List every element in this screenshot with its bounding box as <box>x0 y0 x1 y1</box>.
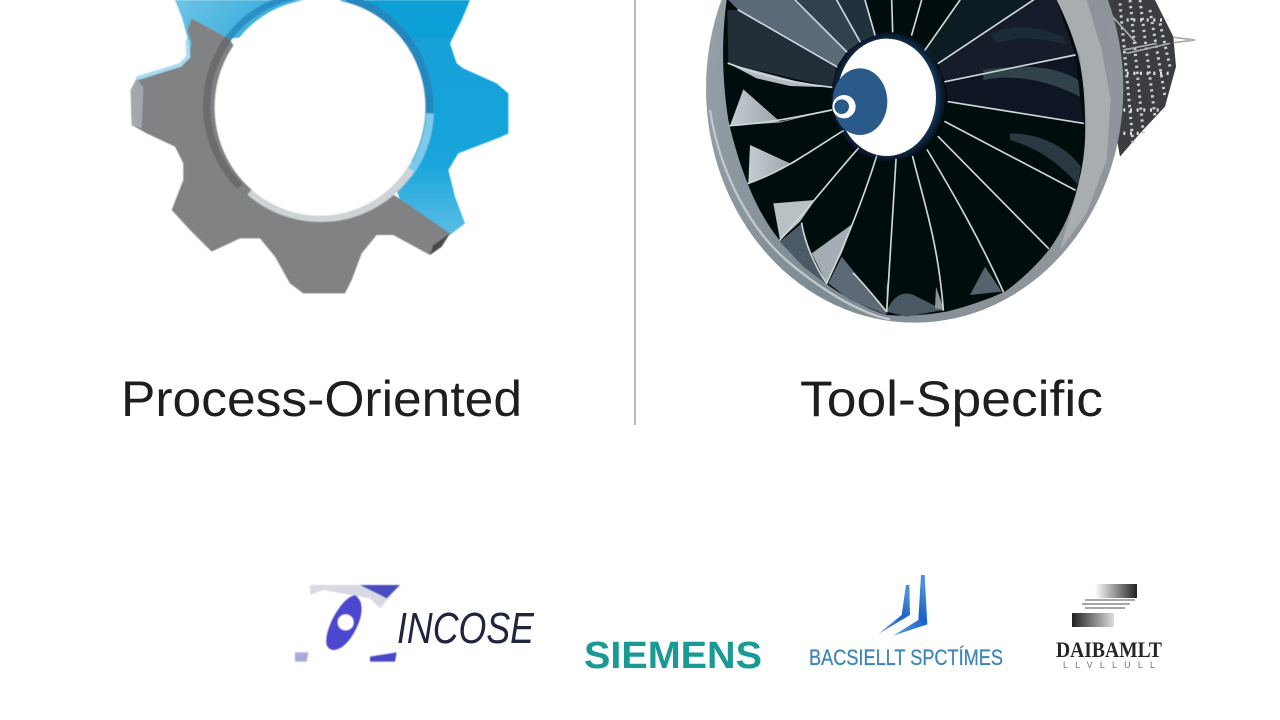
logo: blue chevrons with wordmark <box>809 575 1003 670</box>
logo: INCOSE: INCOSE <box>397 604 535 653</box>
hub <box>830 31 947 163</box>
logo: black stripes with wordmark: DAIBAMLT <box>1056 637 1162 662</box>
icon: striped mark <box>1072 584 1137 627</box>
fan disc <box>723 0 1085 316</box>
logo: black stripes with wordmark <box>1056 584 1162 670</box>
upper left slate blades <box>728 0 847 67</box>
icon: turbofan engine <box>706 0 1195 323</box>
divider line <box>634 0 636 425</box>
heading: Process-Oriented: Process-Oriented <box>121 371 522 427</box>
logo: blue chevrons with wordmark: BACSIELLT SPCTÍMES <box>809 645 1003 670</box>
icon: blue chevrons <box>878 575 927 636</box>
heading: Tool-Specific: Tool-Specific <box>800 371 1103 427</box>
icon: INCOSE mark <box>295 585 400 662</box>
icon: process gear <box>131 0 508 293</box>
logo: black stripes with wordmark: LLVLLULL <box>1063 660 1155 670</box>
logo: INCOSE <box>295 585 535 662</box>
fan blade edges <box>728 0 1083 312</box>
engine core <box>1100 0 1195 157</box>
light blade facets <box>728 63 832 87</box>
logo: SIEMENS: SIEMENS <box>584 635 762 677</box>
nacelle rim <box>706 0 1123 323</box>
